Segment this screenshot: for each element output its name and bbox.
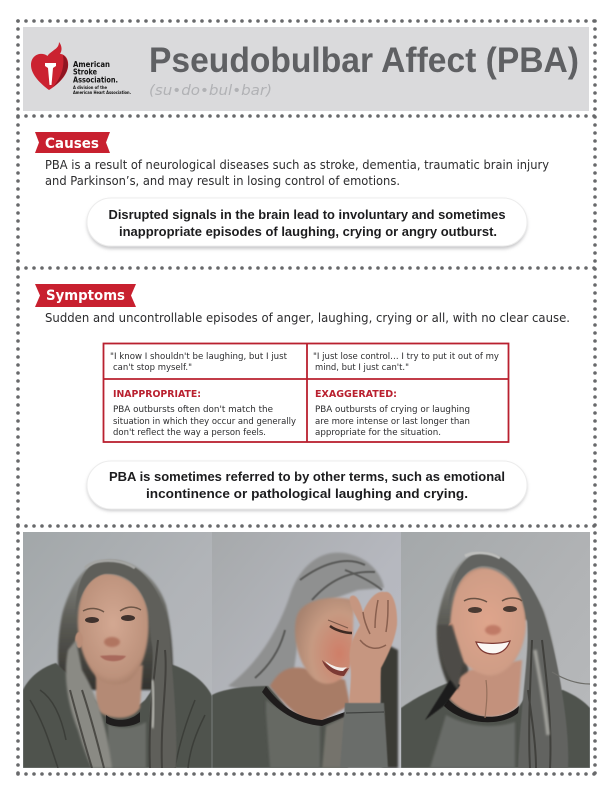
column: exaggerated: PBA outbursts of crying or laughing: [315, 405, 470, 415]
column: exaggerated: EXAGGERATED:: [315, 389, 397, 400]
icon: heart and torch: [31, 42, 68, 90]
causes body text: PBA is a result of neurological diseases such as stroke, dementia, traumatic brain injury: [45, 158, 549, 172]
back hair: [435, 556, 560, 684]
logo wordmark: Association.: [73, 76, 118, 84]
facial features: [464, 598, 522, 602]
logo wordmark: American: [73, 60, 110, 69]
photo strip: three expressions: [23, 532, 590, 768]
sleeve: [340, 703, 388, 768]
callout: other terms: incontinence or pathological laughing and crying.: [146, 486, 468, 501]
front hair: [75, 560, 176, 768]
causes body text: and Parkinson’s, and may result in losing control of emotions.: [45, 174, 400, 188]
hand: [349, 592, 397, 704]
callout: other terms: PBA is sometimes referred to by other terms, such as emotional: [109, 469, 505, 484]
shirt: [23, 663, 212, 768]
column: inappropriate: INAPPROPRIATE:: [113, 389, 201, 400]
quote: exaggerated: [313, 352, 499, 373]
ribbon heading: Symptoms: [35, 284, 136, 307]
title: Pseudobulbar Affect (PBA): [149, 41, 579, 80]
column: exaggerated: are more intense or last longer than: [315, 417, 470, 427]
shirt: [212, 686, 348, 768]
logo wordmark: [73, 60, 131, 95]
neck: [270, 668, 350, 722]
symptoms body text: Sudden and uncontrollable episodes of anger, laughing, crying or all, with no clear cause.: [45, 311, 570, 325]
column: inappropriate: don't reflect the way a person feels.: [113, 428, 266, 438]
facial features: [83, 607, 141, 612]
quote: inappropriate: [110, 352, 288, 373]
shirt: [401, 682, 590, 768]
column: exaggerated: [315, 389, 470, 438]
dark hair behind arm: [378, 640, 398, 768]
logo: American Stroke Association: [31, 42, 131, 95]
causes body text: [45, 158, 549, 188]
ribbon heading: Causes: [35, 132, 110, 153]
hair strap on shoulder: [425, 680, 460, 720]
callout: disrupted signals: Disrupted signals in the brain lead to involuntary and sometimes: [108, 207, 506, 222]
neck: [449, 660, 522, 717]
quote: exaggerated: "I just lose control… I try to put it out of my: [313, 352, 499, 362]
face: [78, 574, 148, 684]
photo: neutral expression: [23, 532, 212, 768]
callout: disrupted signals: inappropriate episodes of laughing, crying or angry outburst.: [119, 224, 497, 239]
callout: other terms: [87, 461, 527, 511]
symptoms table: [104, 344, 508, 442]
ribbon heading: Causes: Causes: [45, 136, 99, 152]
header band: [23, 27, 589, 111]
face: [295, 598, 354, 684]
photo: laughing expression: [401, 532, 590, 768]
long hair: [228, 553, 384, 700]
callout: disrupted signals: [87, 198, 527, 249]
ribbon heading: Symptoms: Symptoms: [46, 288, 125, 304]
quote: exaggerated: mind, but I just can't.": [315, 363, 409, 373]
quote: inappropriate: "I know I shouldn't be laughing, but I just: [110, 352, 288, 362]
logo wordmark: American Heart Association.: [73, 90, 131, 95]
column: inappropriate: PBA outbursts often don't match the: [113, 405, 273, 415]
back hair: [58, 560, 173, 690]
neck: [96, 665, 143, 718]
column: inappropriate: situation in which they occur and generally: [113, 417, 296, 427]
pronunciation: (su•do•bul•bar): [149, 83, 272, 99]
face: [450, 568, 526, 676]
logo wordmark: Stroke: [73, 68, 97, 76]
column: exaggerated: appropriate for the situation.: [315, 428, 441, 438]
photo: crying expression: [212, 532, 401, 768]
column: inappropriate: [113, 389, 296, 438]
quote: inappropriate: can't stop myself.": [113, 363, 192, 373]
front hair: [448, 553, 568, 768]
logo wordmark: A division of the: [73, 85, 107, 90]
